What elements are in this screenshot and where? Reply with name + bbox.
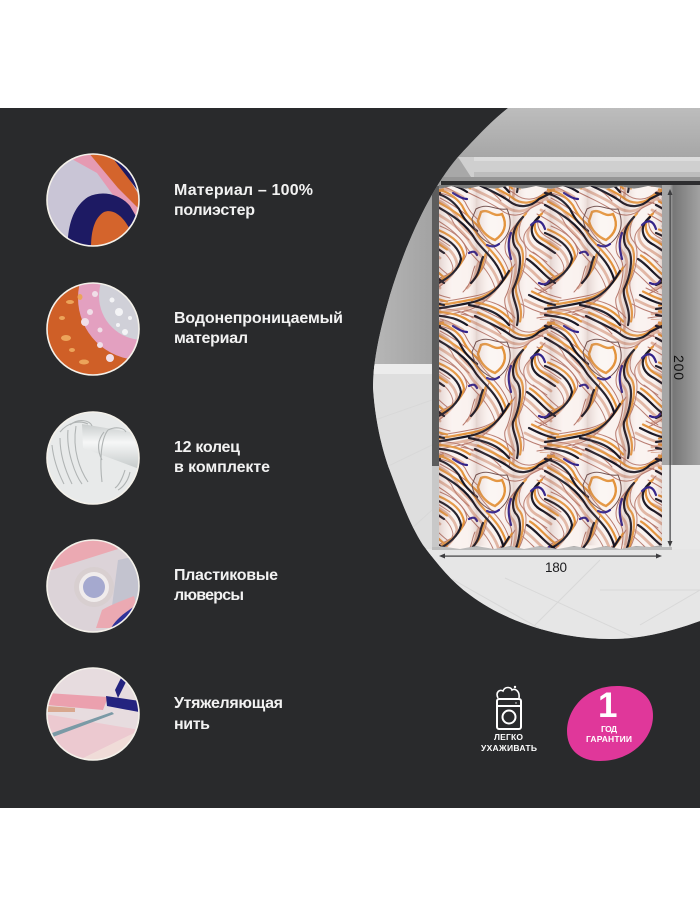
- text: easy care: УХАЖИВАТЬ: [481, 743, 537, 753]
- bathroom photo in rounded shape: [370, 108, 700, 648]
- icon: washing machine: [497, 686, 521, 729]
- icon: fabric swatch: [45, 152, 142, 248]
- text: easy care: [481, 732, 537, 753]
- text: warranty: [586, 724, 632, 744]
- ceiling: [457, 108, 700, 158]
- icon: weighted hem: [45, 666, 141, 762]
- room base: [370, 108, 700, 648]
- text: grommets: [174, 567, 278, 604]
- text: waterproof: [174, 310, 343, 347]
- feature: material: [45, 152, 313, 248]
- dimension arrow: height: [668, 189, 672, 547]
- icon: water drops: [46, 282, 140, 376]
- number: 1: 1: [598, 686, 617, 725]
- text: warranty: ГАРАНТИИ: [586, 734, 632, 744]
- icon: curtain rings on rod: [45, 410, 142, 506]
- feature: grommets: [45, 538, 278, 634]
- text: waterproof: Водонепроницаемый: [174, 310, 343, 327]
- text: warranty: ГОД: [601, 724, 617, 734]
- dimension label: 180: 180: [545, 560, 567, 575]
- feature: weighted thread: [45, 666, 283, 762]
- text: material: полиэстер: [174, 202, 255, 219]
- dark panel: [0, 108, 700, 808]
- warranty badge: [567, 686, 653, 761]
- feature: rings: [45, 410, 270, 506]
- text: waterproof: материал: [174, 330, 248, 347]
- left wall: [374, 182, 440, 370]
- text: material: Материал – 100%: [174, 182, 313, 199]
- text: grommets: люверсы: [174, 587, 244, 604]
- text: weighted thread: Утяжеляющая: [174, 695, 283, 712]
- text: weighted thread: нить: [174, 716, 210, 733]
- text: grommets: Пластиковые: [174, 567, 278, 584]
- curtain shadow column: [432, 186, 439, 466]
- curtain with marble pattern: [439, 186, 662, 549]
- icon: plastic grommet: [45, 538, 142, 634]
- text: rings: [174, 439, 270, 476]
- floor: [426, 549, 700, 639]
- pink blob: [567, 686, 653, 761]
- dimension label: 200: 200: [671, 355, 687, 380]
- text: easy care: ЛЕГКО: [494, 732, 523, 742]
- text: weighted thread: [174, 695, 283, 733]
- cornice: [458, 157, 700, 177]
- curtain rail: [441, 181, 700, 185]
- dimension arrow: width: [439, 554, 662, 558]
- easy care badge: [481, 686, 537, 753]
- text: rings: в комплекте: [174, 459, 270, 476]
- feature: waterproof: [46, 282, 342, 376]
- lower wall tiles: [370, 366, 440, 556]
- text: rings: 12 колец: [174, 439, 240, 456]
- text: material: [174, 182, 313, 219]
- right wall: [670, 185, 698, 465]
